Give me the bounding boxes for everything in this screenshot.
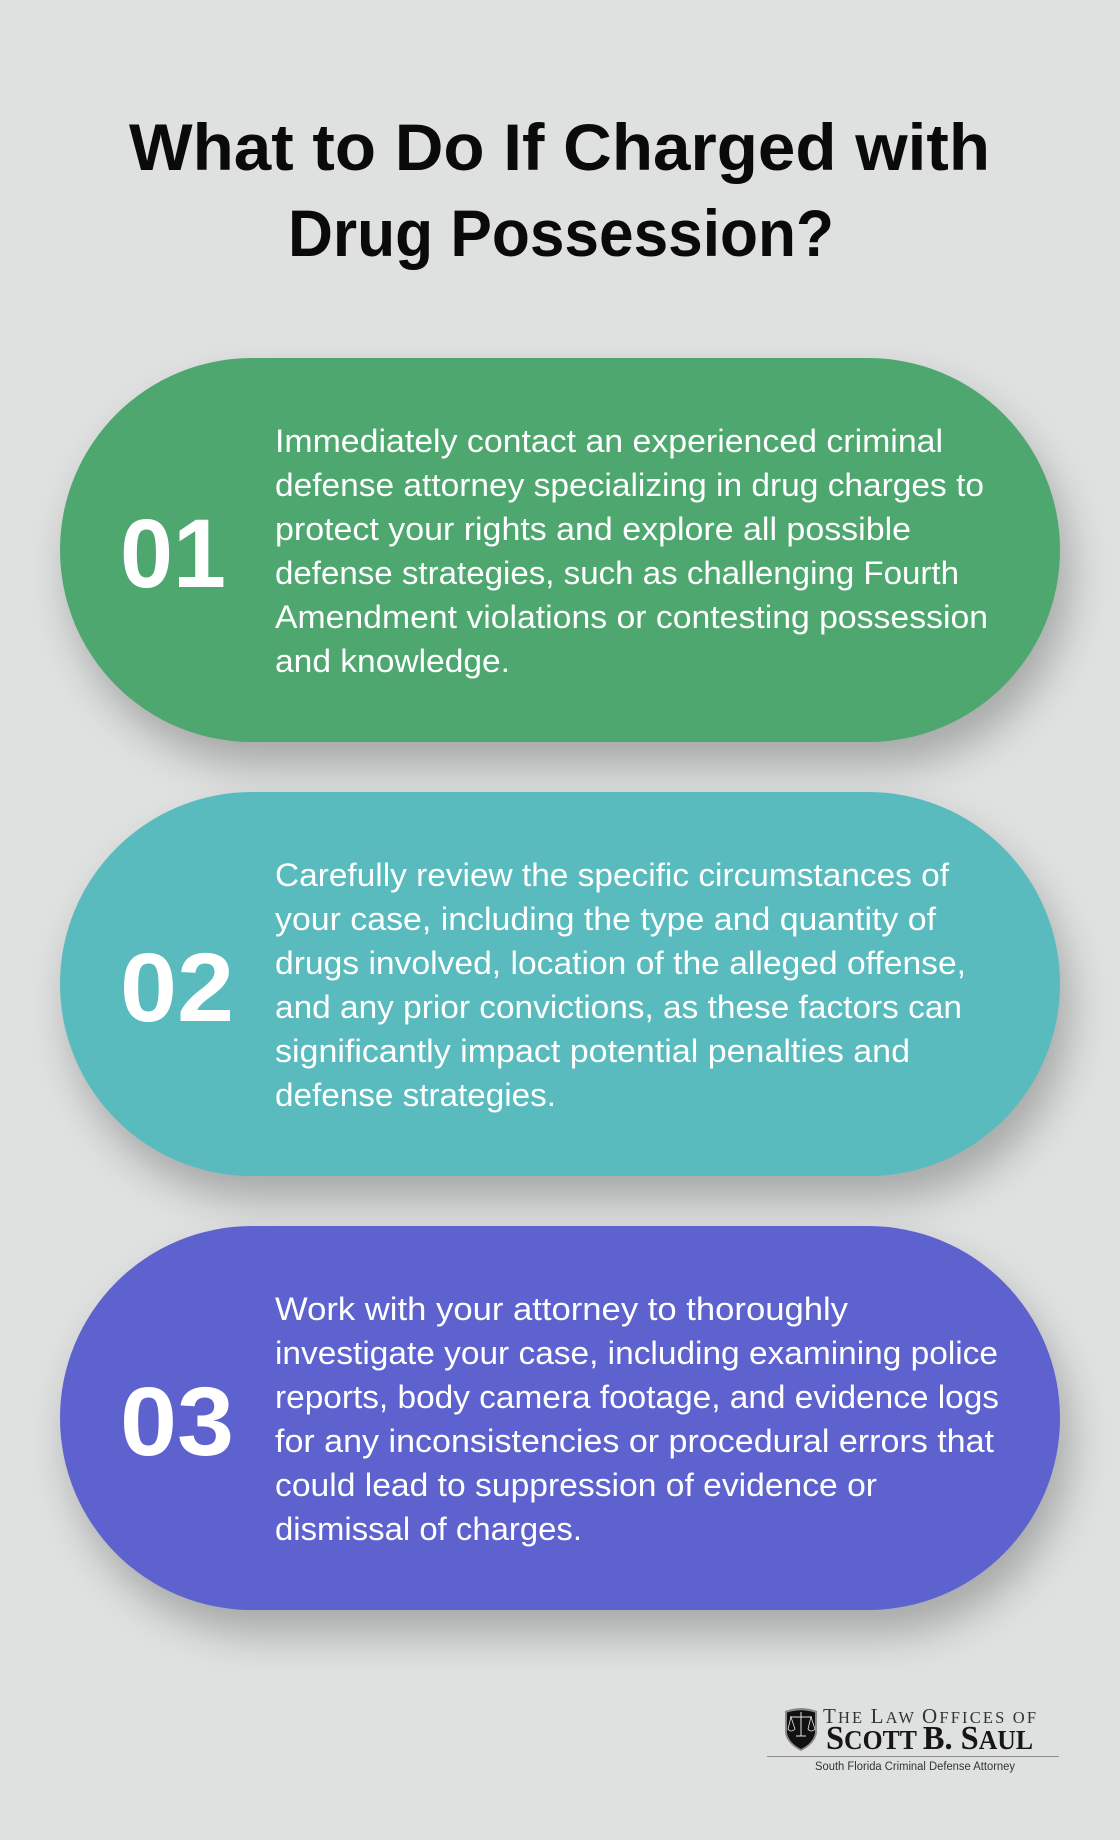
step 02 text: defense strategies. [275, 1077, 556, 1113]
panel: step 01 [60, 358, 1060, 742]
step 02 text: and any prior convictions, as these factors can [275, 989, 962, 1025]
title [129, 110, 990, 270]
panel: step 02 [60, 792, 1060, 1176]
step 02 text [275, 857, 966, 1113]
step 03 text: Work with your attorney to thoroughly [275, 1291, 848, 1327]
step 01 text: and knowledge. [275, 643, 510, 679]
step 01 text: defense strategies, such as challenging Fourth [275, 555, 959, 591]
step 03 text: could lead to suppression of evidence or [275, 1467, 877, 1503]
step 02 text: drugs involved, location of the alleged offense, [275, 945, 966, 981]
step 03 text: for any inconsistencies or procedural errors that [275, 1423, 994, 1459]
step 03 text: dismissal of charges. [275, 1511, 582, 1547]
title: Drug Possession? [288, 196, 834, 270]
step 03 text: investigate your case, including examining police [275, 1335, 998, 1371]
step 03 text [275, 1291, 999, 1547]
step 01 text: defense attorney specializing in drug charges to [275, 467, 984, 503]
logo: The Law Offices of Scott B. Saul [767, 1704, 1059, 1773]
step 02 text: Carefully review the specific circumstances of [275, 857, 949, 893]
number 02: 02 [120, 933, 234, 1042]
step 01 text: protect your rights and explore all possible [275, 511, 911, 547]
step 01 text [275, 423, 988, 679]
step 01 text: Amendment violations or contesting possession [275, 599, 988, 635]
logo tagline: South Florida Criminal Defense Attorney [815, 1761, 1015, 1773]
step 01 text: Immediately contact an experienced criminal [275, 423, 943, 459]
number 01: 01 [120, 499, 226, 608]
number 03: 03 [120, 1367, 234, 1476]
step 02 text: your case, including the type and quantity of [275, 901, 936, 937]
title: What to Do If Charged with [129, 110, 990, 184]
logo text: the law offices of: THE LAW OFFICES OF [823, 1704, 1036, 1728]
icon: shield with scales [785, 1708, 817, 1751]
logo text: scott b. saul: SCOTT B. SAUL [826, 1720, 1033, 1757]
panel: step 03 [60, 1226, 1060, 1610]
step 02 text: significantly impact potential penalties and [275, 1033, 910, 1069]
step 03 text: reports, body camera footage, and evidence logs [275, 1379, 999, 1415]
